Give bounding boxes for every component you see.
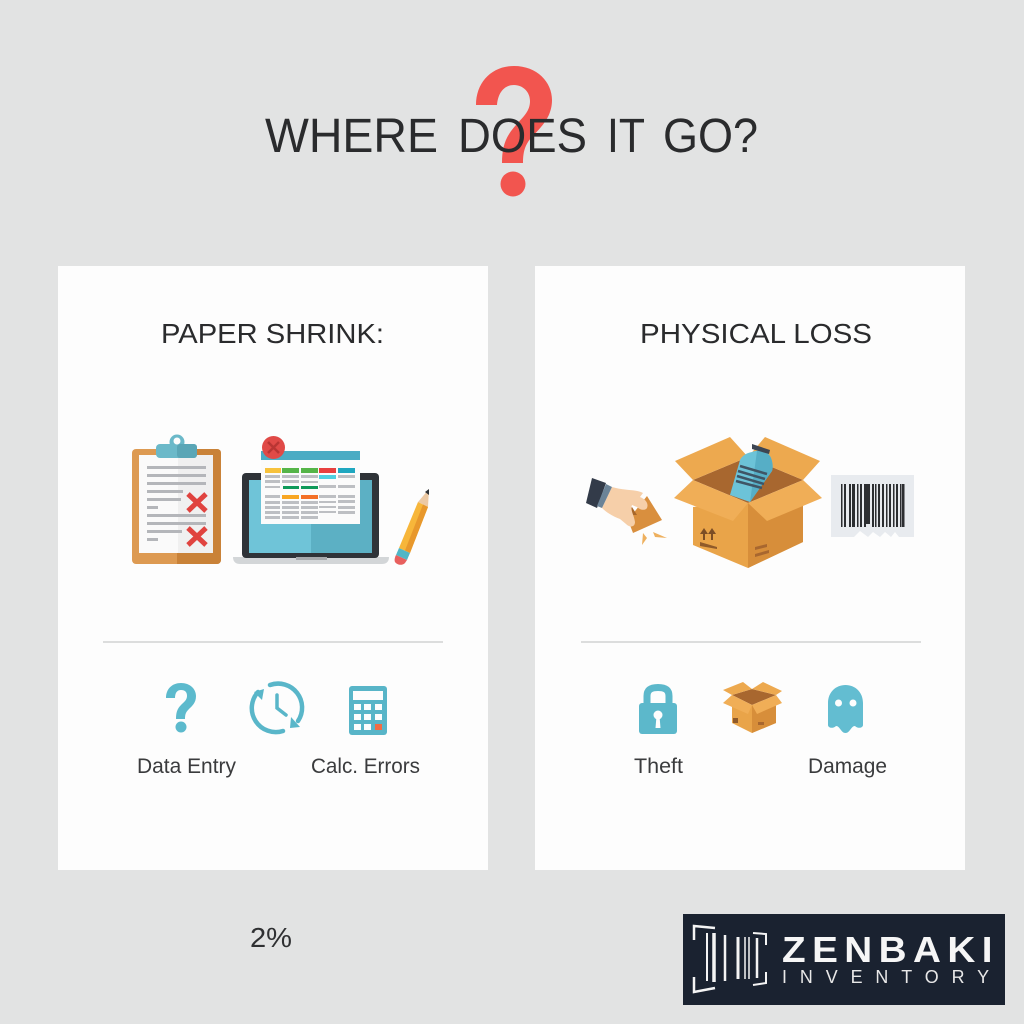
label: calc errors: Calc. Errors (311, 755, 420, 778)
footnote percentage: 2% (250, 922, 292, 953)
icon: small open box (723, 682, 782, 733)
title (265, 110, 758, 163)
title: DOES (458, 110, 587, 163)
icon: ghost (828, 685, 863, 733)
panel: physical loss (535, 266, 965, 870)
icon: torn barcode label (831, 475, 914, 537)
logo: zenbaki inventory: ZENBAKI (782, 929, 999, 970)
icon: laptop with spreadsheet (233, 436, 389, 564)
icon: clipboard with errors (132, 434, 221, 564)
icon: pencil (395, 489, 429, 565)
icon: padlock (639, 688, 677, 734)
heading: physical loss: PHYSICAL LOSS (640, 318, 872, 349)
icon: hand with torn box (586, 478, 667, 545)
label: theft: Theft (634, 755, 683, 778)
icon: data entry question mark (166, 683, 196, 732)
logo: zenbaki inventory (683, 914, 1005, 1005)
icon: large red question mark (476, 66, 552, 196)
icon: open cardboard box with bottle (674, 437, 822, 568)
logo: zenbaki inventory: INVENTORY (782, 967, 1002, 987)
icon: calculator (349, 686, 387, 735)
icon: clock with cycle arrows (252, 684, 302, 732)
label: damage: Damage (808, 755, 887, 778)
label: data entry: Data Entry (137, 755, 236, 778)
icon: blue bottle (730, 444, 773, 502)
icon: logo barcode mark (694, 926, 766, 992)
panel: paper shrink (58, 266, 488, 870)
heading: paper shrink: PAPER SHRINK: (161, 318, 384, 349)
title: IT (607, 110, 645, 163)
title: WHERE (265, 110, 438, 163)
title: GO? (663, 110, 758, 163)
